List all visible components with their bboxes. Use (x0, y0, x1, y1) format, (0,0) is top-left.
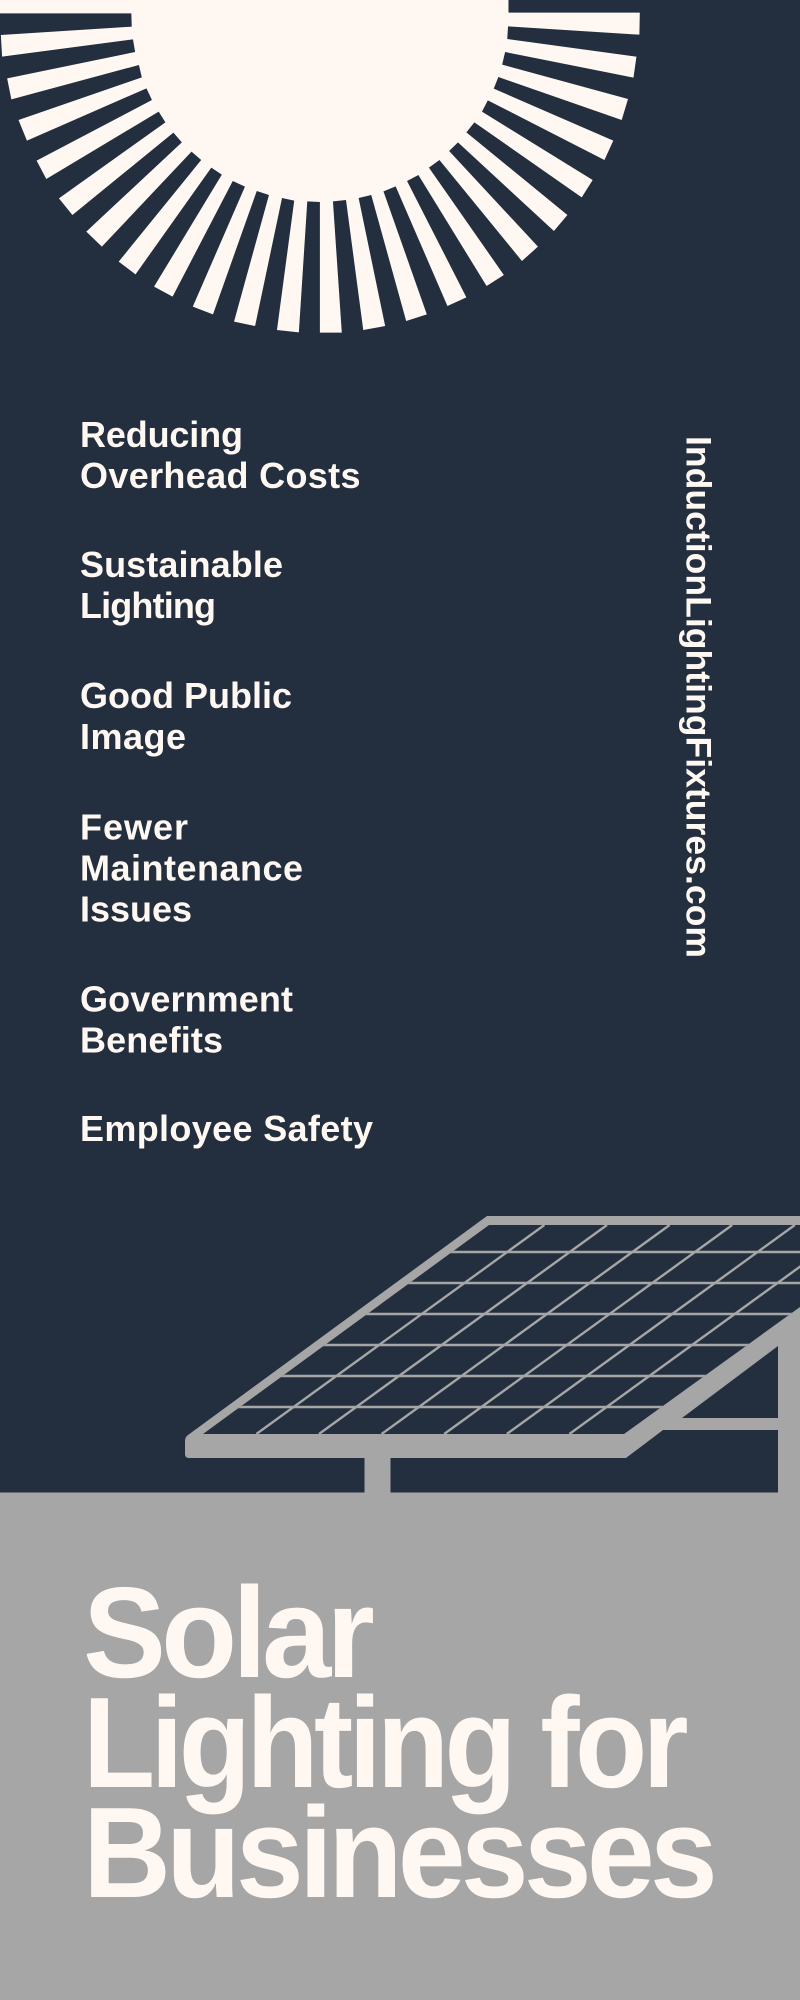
title: Solar (83, 1561, 374, 1705)
list item: Sustainable Lighting: Sustainable (80, 544, 283, 585)
illustration: solar panel (185, 1216, 800, 1494)
list item: Fewer Maintenance Issues (80, 806, 303, 930)
list item: Government Benefits: Benefits (80, 1020, 223, 1060)
footer band (0, 1492, 800, 2000)
list item: Reducing Overhead Costs (80, 414, 360, 496)
list item: Employee Safety: Employee Safety (80, 1108, 373, 1149)
icon: sunburst (0, 0, 640, 333)
list item: Reducing Overhead Costs: Overhead Costs (80, 455, 360, 496)
list item: Fewer Maintenance Issues: Fewer (80, 806, 188, 848)
list item: Sustainable Lighting (80, 544, 283, 626)
list item: Sustainable Lighting: Lighting (80, 585, 216, 626)
title: Lighting for (83, 1671, 687, 1815)
list item: Government Benefits (80, 978, 293, 1060)
list item: Good Public Image (80, 675, 292, 757)
list item: Fewer Maintenance Issues: Issues (80, 888, 192, 930)
vertical website text: InductionLightingFixtures.com (678, 436, 718, 958)
list of benefits (80, 414, 373, 1149)
list item: Good Public Image: Image (80, 716, 186, 757)
list item: Fewer Maintenance Issues: Maintenance (80, 848, 303, 888)
list item: Reducing Overhead Costs: Reducing (80, 414, 243, 455)
title (83, 1561, 713, 1925)
title: Businesses (83, 1781, 713, 1925)
list item: Government Benefits: Government (80, 978, 293, 1020)
list item: Good Public Image: Good Public (80, 675, 292, 716)
